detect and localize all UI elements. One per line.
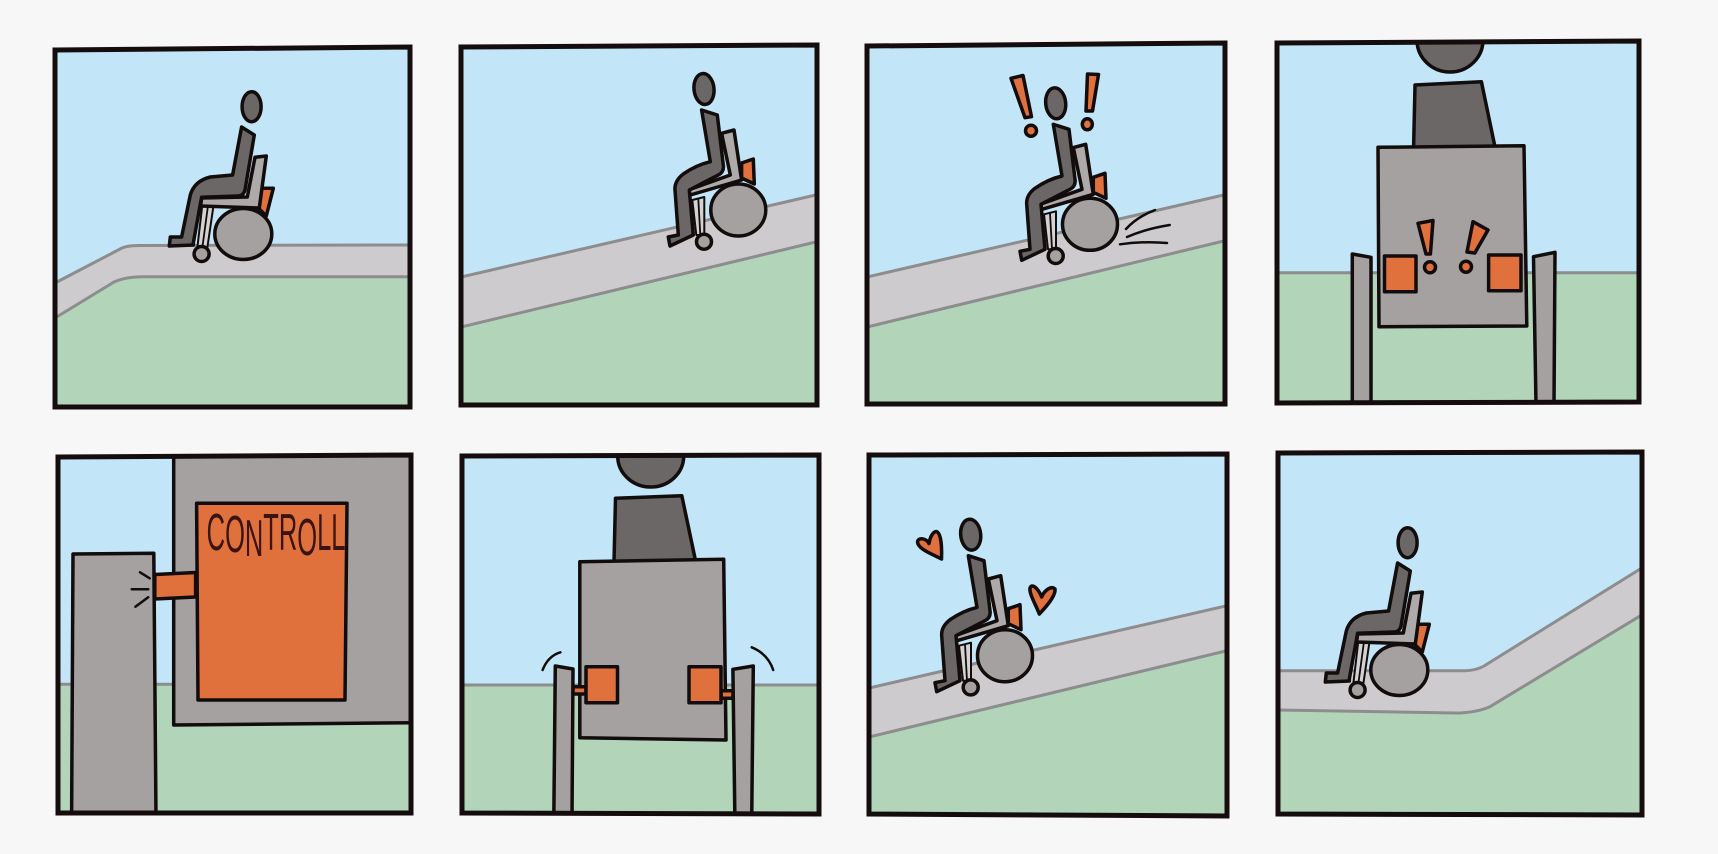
right wheel	[733, 666, 753, 820]
panel 3: slipping backwards on ramp	[860, 40, 1230, 408]
icon: left exclamation mark	[1011, 76, 1036, 136]
figure: wheelchair user on slope	[935, 518, 1032, 695]
motion lines behind wheel	[1120, 210, 1170, 244]
left arm	[573, 687, 586, 694]
right brake block	[689, 667, 721, 703]
chair back	[1378, 146, 1527, 327]
torso, rear view	[1414, 82, 1495, 148]
left wheel	[554, 666, 573, 820]
panel 6: rear view with brake blocks released	[456, 425, 824, 820]
icon: right exclamation mark	[1082, 74, 1098, 130]
torso, rear view	[614, 496, 696, 562]
icon: left exclamation mark	[1418, 220, 1436, 273]
chair back	[580, 559, 726, 740]
panel 7: happy rolling up the ramp	[862, 448, 1232, 820]
head, rear view	[616, 458, 686, 489]
right movement arc	[752, 647, 773, 670]
control housing	[174, 452, 415, 725]
figure: wheelchair user	[1325, 528, 1429, 698]
figure: wheelchair user	[169, 92, 273, 262]
left wheel	[1352, 254, 1371, 405]
right wheel	[1534, 252, 1555, 405]
left movement arc	[543, 652, 560, 670]
panel 8: at the bottom of the ramp	[1272, 448, 1647, 820]
label: CONTROLL: CONTROLL	[207, 503, 345, 567]
right arm	[721, 691, 733, 698]
panel 1: wheelchair user on flat path at top of ramp	[50, 45, 415, 410]
right brake block	[1489, 255, 1521, 291]
left brake block	[586, 667, 618, 703]
figure: wheelchair user on slope	[668, 73, 766, 249]
panel 2: rolling up the ramp	[456, 42, 821, 410]
panel 4: rear view with brake blocks disengaged	[1274, 38, 1642, 406]
pillar	[72, 553, 156, 818]
icon: right exclamation mark	[1460, 222, 1488, 272]
head, rear view	[1416, 44, 1484, 74]
figure: wheelchair user sliding	[1020, 87, 1118, 264]
panel 5: control box pressed by pillar	[52, 450, 417, 819]
icon: right heart	[1030, 586, 1055, 614]
orange control panel	[197, 503, 347, 700]
impact lines	[132, 572, 150, 607]
icon: left heart	[918, 532, 942, 559]
orange actuator arm	[155, 572, 196, 599]
left brake block	[1384, 256, 1416, 292]
